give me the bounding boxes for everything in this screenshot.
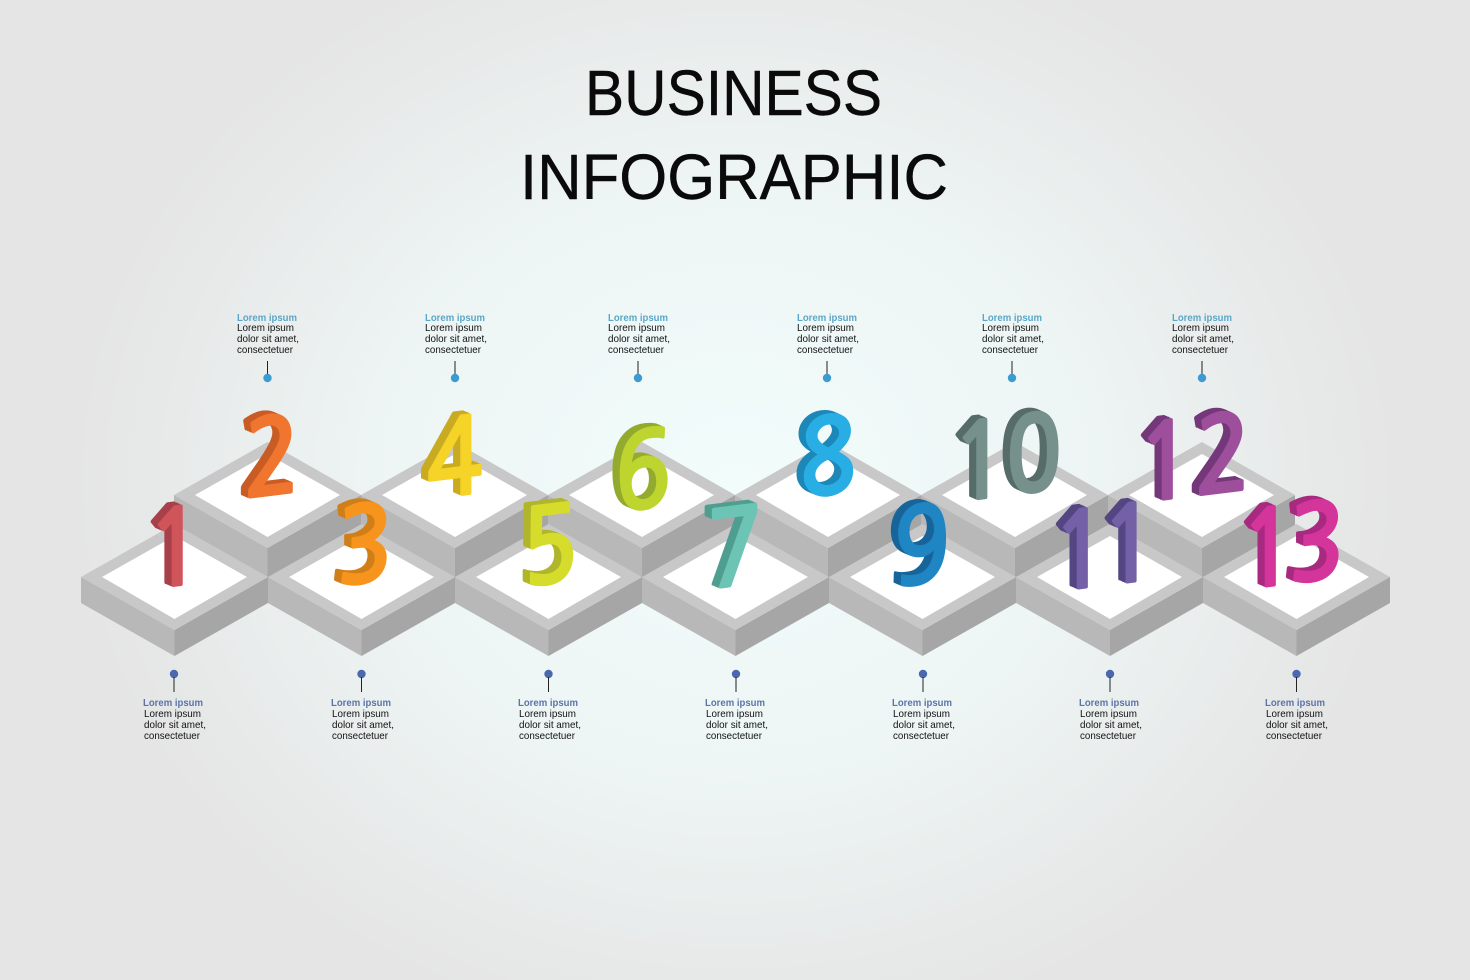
callout 7: consectetuer (706, 730, 762, 742)
number 13: 13 (1237, 489, 1337, 606)
callout 1: consectetuer (144, 730, 200, 742)
callout 5: Lorem ipsum (518, 697, 578, 709)
number 12: 12 (1129, 398, 1245, 517)
callout 3 (331, 670, 394, 742)
number 12: 12 (1133, 399, 1248, 518)
number 8: 8 (799, 403, 857, 515)
callout 13: dolor sit amet, (1266, 719, 1328, 731)
callout 8: Lorem ipsum (797, 322, 854, 334)
callout 7 (705, 670, 768, 742)
number 10: 10 (951, 401, 1059, 519)
title (520, 57, 948, 213)
number 8: 8 (797, 403, 855, 515)
number 6: 6 (607, 414, 665, 526)
platform: lower row of blocks (81, 524, 1390, 656)
number 6: 6 (614, 417, 672, 529)
callout 2 (237, 312, 299, 382)
callout 5 (518, 670, 581, 742)
callout 4: Lorem ipsum (425, 312, 485, 324)
callout 1: Lorem ipsum (143, 697, 203, 709)
number 4: 4 (421, 402, 479, 514)
callout 4: Lorem ipsum (425, 322, 482, 334)
number 5: 5 (517, 491, 575, 603)
callout 11: Lorem ipsum (1080, 708, 1137, 720)
callout 2: Lorem ipsum (237, 322, 294, 334)
callout 4: dolor sit amet, (425, 333, 487, 345)
title: BUSINESS (585, 57, 882, 129)
callout 4: consectetuer (425, 344, 481, 356)
number 5: 5 (514, 489, 572, 601)
callout 13: consectetuer (1266, 730, 1322, 742)
callout 10 (982, 312, 1044, 382)
number 11: 11 (1046, 490, 1143, 606)
number 7: 7 (699, 491, 757, 603)
number 3: 3 (334, 491, 392, 603)
callout 11: dolor sit amet, (1080, 719, 1142, 731)
number 9: 9 (891, 492, 949, 604)
callout 5: Lorem ipsum (519, 708, 576, 720)
number 10: 10 (944, 398, 1052, 516)
callout 8: consectetuer (797, 344, 853, 356)
callout 11 (1079, 670, 1142, 742)
number 6: 6 (609, 415, 667, 527)
number 4: 4 (419, 401, 477, 513)
number 9: 9 (889, 491, 947, 603)
callout 10: Lorem ipsum (982, 322, 1039, 334)
callout 8: Lorem ipsum (797, 312, 857, 324)
platform: upper row of blocks (174, 442, 1295, 578)
number 7: 7 (704, 494, 762, 606)
callout 9: dolor sit amet, (893, 719, 955, 731)
callout 10: Lorem ipsum (982, 312, 1042, 324)
callout 6: Lorem ipsum (608, 312, 668, 324)
number 6: 6 (612, 417, 670, 529)
number 7: 7 (702, 493, 760, 605)
number 1: 1 (141, 492, 199, 604)
callout 6: Lorem ipsum (608, 322, 665, 334)
callout 8 (797, 312, 859, 382)
number 2: 2 (238, 401, 296, 513)
callout 10: dolor sit amet, (982, 333, 1044, 345)
callout 7: Lorem ipsum (706, 708, 763, 720)
number 7: 7 (701, 492, 759, 604)
number 3: 3 (336, 491, 394, 603)
number 12: 12 (1136, 401, 1252, 520)
number 5: 5 (516, 490, 574, 602)
number 4: 4 (422, 403, 480, 515)
number 4: 4 (426, 404, 484, 516)
title: INFOGRAPHIC (520, 141, 948, 213)
number 4: 4 (424, 404, 482, 516)
number 8: 8 (794, 401, 852, 513)
number 11: 11 (1048, 490, 1145, 607)
callout 6 (608, 312, 670, 382)
callout 12: Lorem ipsum (1172, 312, 1232, 324)
number 13: 13 (1234, 487, 1334, 604)
number 3: 3 (329, 488, 387, 600)
callout 1 (143, 670, 206, 742)
callout 6: consectetuer (608, 344, 664, 356)
callout 3: Lorem ipsum (332, 708, 389, 720)
callout 13: Lorem ipsum (1266, 708, 1323, 720)
number 5: 5 (519, 492, 577, 604)
callout 2: consectetuer (237, 344, 293, 356)
number 3: 3 (332, 490, 390, 602)
number 1: 1 (142, 493, 200, 605)
number 11: 11 (1049, 491, 1147, 608)
callout 2: Lorem ipsum (237, 312, 297, 324)
number 1: 1 (144, 494, 202, 606)
callout 3: dolor sit amet, (332, 719, 394, 731)
callout 12: Lorem ipsum (1172, 322, 1229, 334)
callout 9 (892, 670, 955, 742)
callout 11: consectetuer (1080, 730, 1136, 742)
number 7: 7 (706, 494, 764, 606)
callout 6: dolor sit amet, (608, 333, 670, 345)
callout 2: dolor sit amet, (237, 333, 299, 345)
number 5: 5 (521, 492, 579, 604)
callout 12: dolor sit amet, (1172, 333, 1234, 345)
callout 5: dolor sit amet, (519, 719, 581, 731)
callout 10: consectetuer (982, 344, 1038, 356)
callout 7: Lorem ipsum (705, 697, 765, 709)
number 2: 2 (239, 402, 297, 514)
number 12: 12 (1134, 400, 1250, 519)
callout 12 (1172, 312, 1234, 382)
number 8: 8 (792, 400, 850, 512)
callout 12: consectetuer (1172, 344, 1228, 356)
number 11: 11 (1044, 489, 1142, 606)
callout 13: Lorem ipsum (1265, 697, 1325, 709)
number 13: 13 (1239, 490, 1339, 607)
number 3: 3 (331, 489, 389, 601)
number 11: 11 (1051, 492, 1149, 609)
number 12: 12 (1131, 399, 1246, 518)
number 8: 8 (795, 402, 853, 514)
number 10: 10 (945, 399, 1054, 517)
callout 1: dolor sit amet, (144, 719, 206, 731)
callout 7: dolor sit amet, (706, 719, 768, 731)
number 9: 9 (888, 490, 946, 602)
number 10: 10 (949, 401, 1057, 519)
callout 13 (1265, 670, 1328, 742)
number 9: 9 (893, 492, 951, 604)
number 2: 2 (241, 403, 299, 515)
number 13: 13 (1236, 488, 1335, 605)
callout 11: Lorem ipsum (1079, 697, 1139, 709)
callout 9: consectetuer (893, 730, 949, 742)
number 10: 10 (947, 400, 1056, 518)
number 2: 2 (243, 403, 301, 515)
callout 9: Lorem ipsum (892, 697, 952, 709)
callout 8: dolor sit amet, (797, 333, 859, 345)
callout 5: consectetuer (519, 730, 575, 742)
number 1: 1 (146, 494, 204, 606)
number 9: 9 (886, 489, 944, 601)
number 2: 2 (236, 400, 294, 512)
number 6: 6 (610, 416, 668, 528)
callout 3: consectetuer (332, 730, 388, 742)
number 1: 1 (139, 491, 197, 603)
callout 3: Lorem ipsum (331, 697, 391, 709)
callout 9: Lorem ipsum (893, 708, 950, 720)
callout 4 (425, 312, 487, 382)
number 13: 13 (1232, 487, 1332, 604)
callout 1: Lorem ipsum (144, 708, 201, 720)
